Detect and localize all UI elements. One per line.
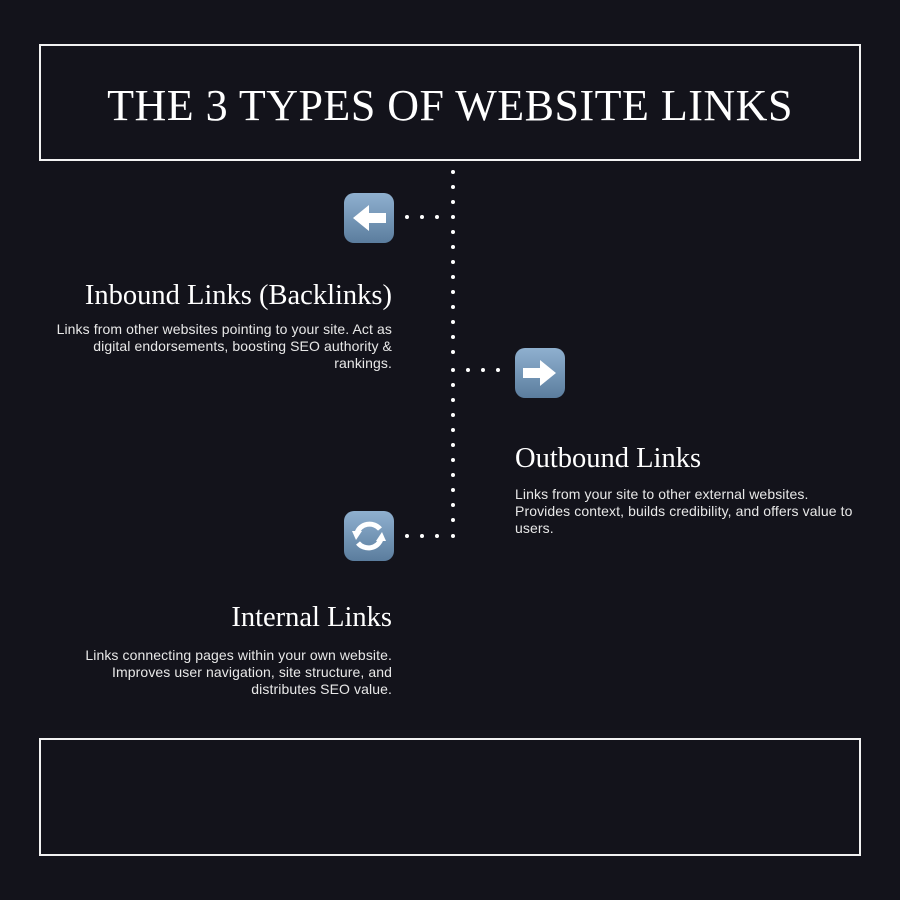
icon: left arrow (344, 193, 394, 243)
icon: refresh (344, 511, 394, 561)
outbound text: Links from your site to other external websites. Provides context, builds credibility, and offers value to users. (515, 486, 852, 536)
internal text: Links connecting pages within your own website. Improves user navigation, site structure, and distributes SEO value. (85, 647, 392, 697)
title: THE 3 TYPES OF WEBSITE LINKS (107, 81, 793, 130)
outbound heading: Outbound Links (515, 443, 701, 474)
inbound heading: Inbound Links (Backlinks) (85, 280, 392, 311)
footer box (39, 738, 861, 856)
internal heading: Internal Links (231, 602, 392, 633)
inbound text: Links from other websites pointing to your site. Act as digital endorsements, boosting SEO authority & rankings. (57, 321, 392, 371)
title box (39, 44, 861, 161)
icon: right arrow (515, 348, 565, 398)
